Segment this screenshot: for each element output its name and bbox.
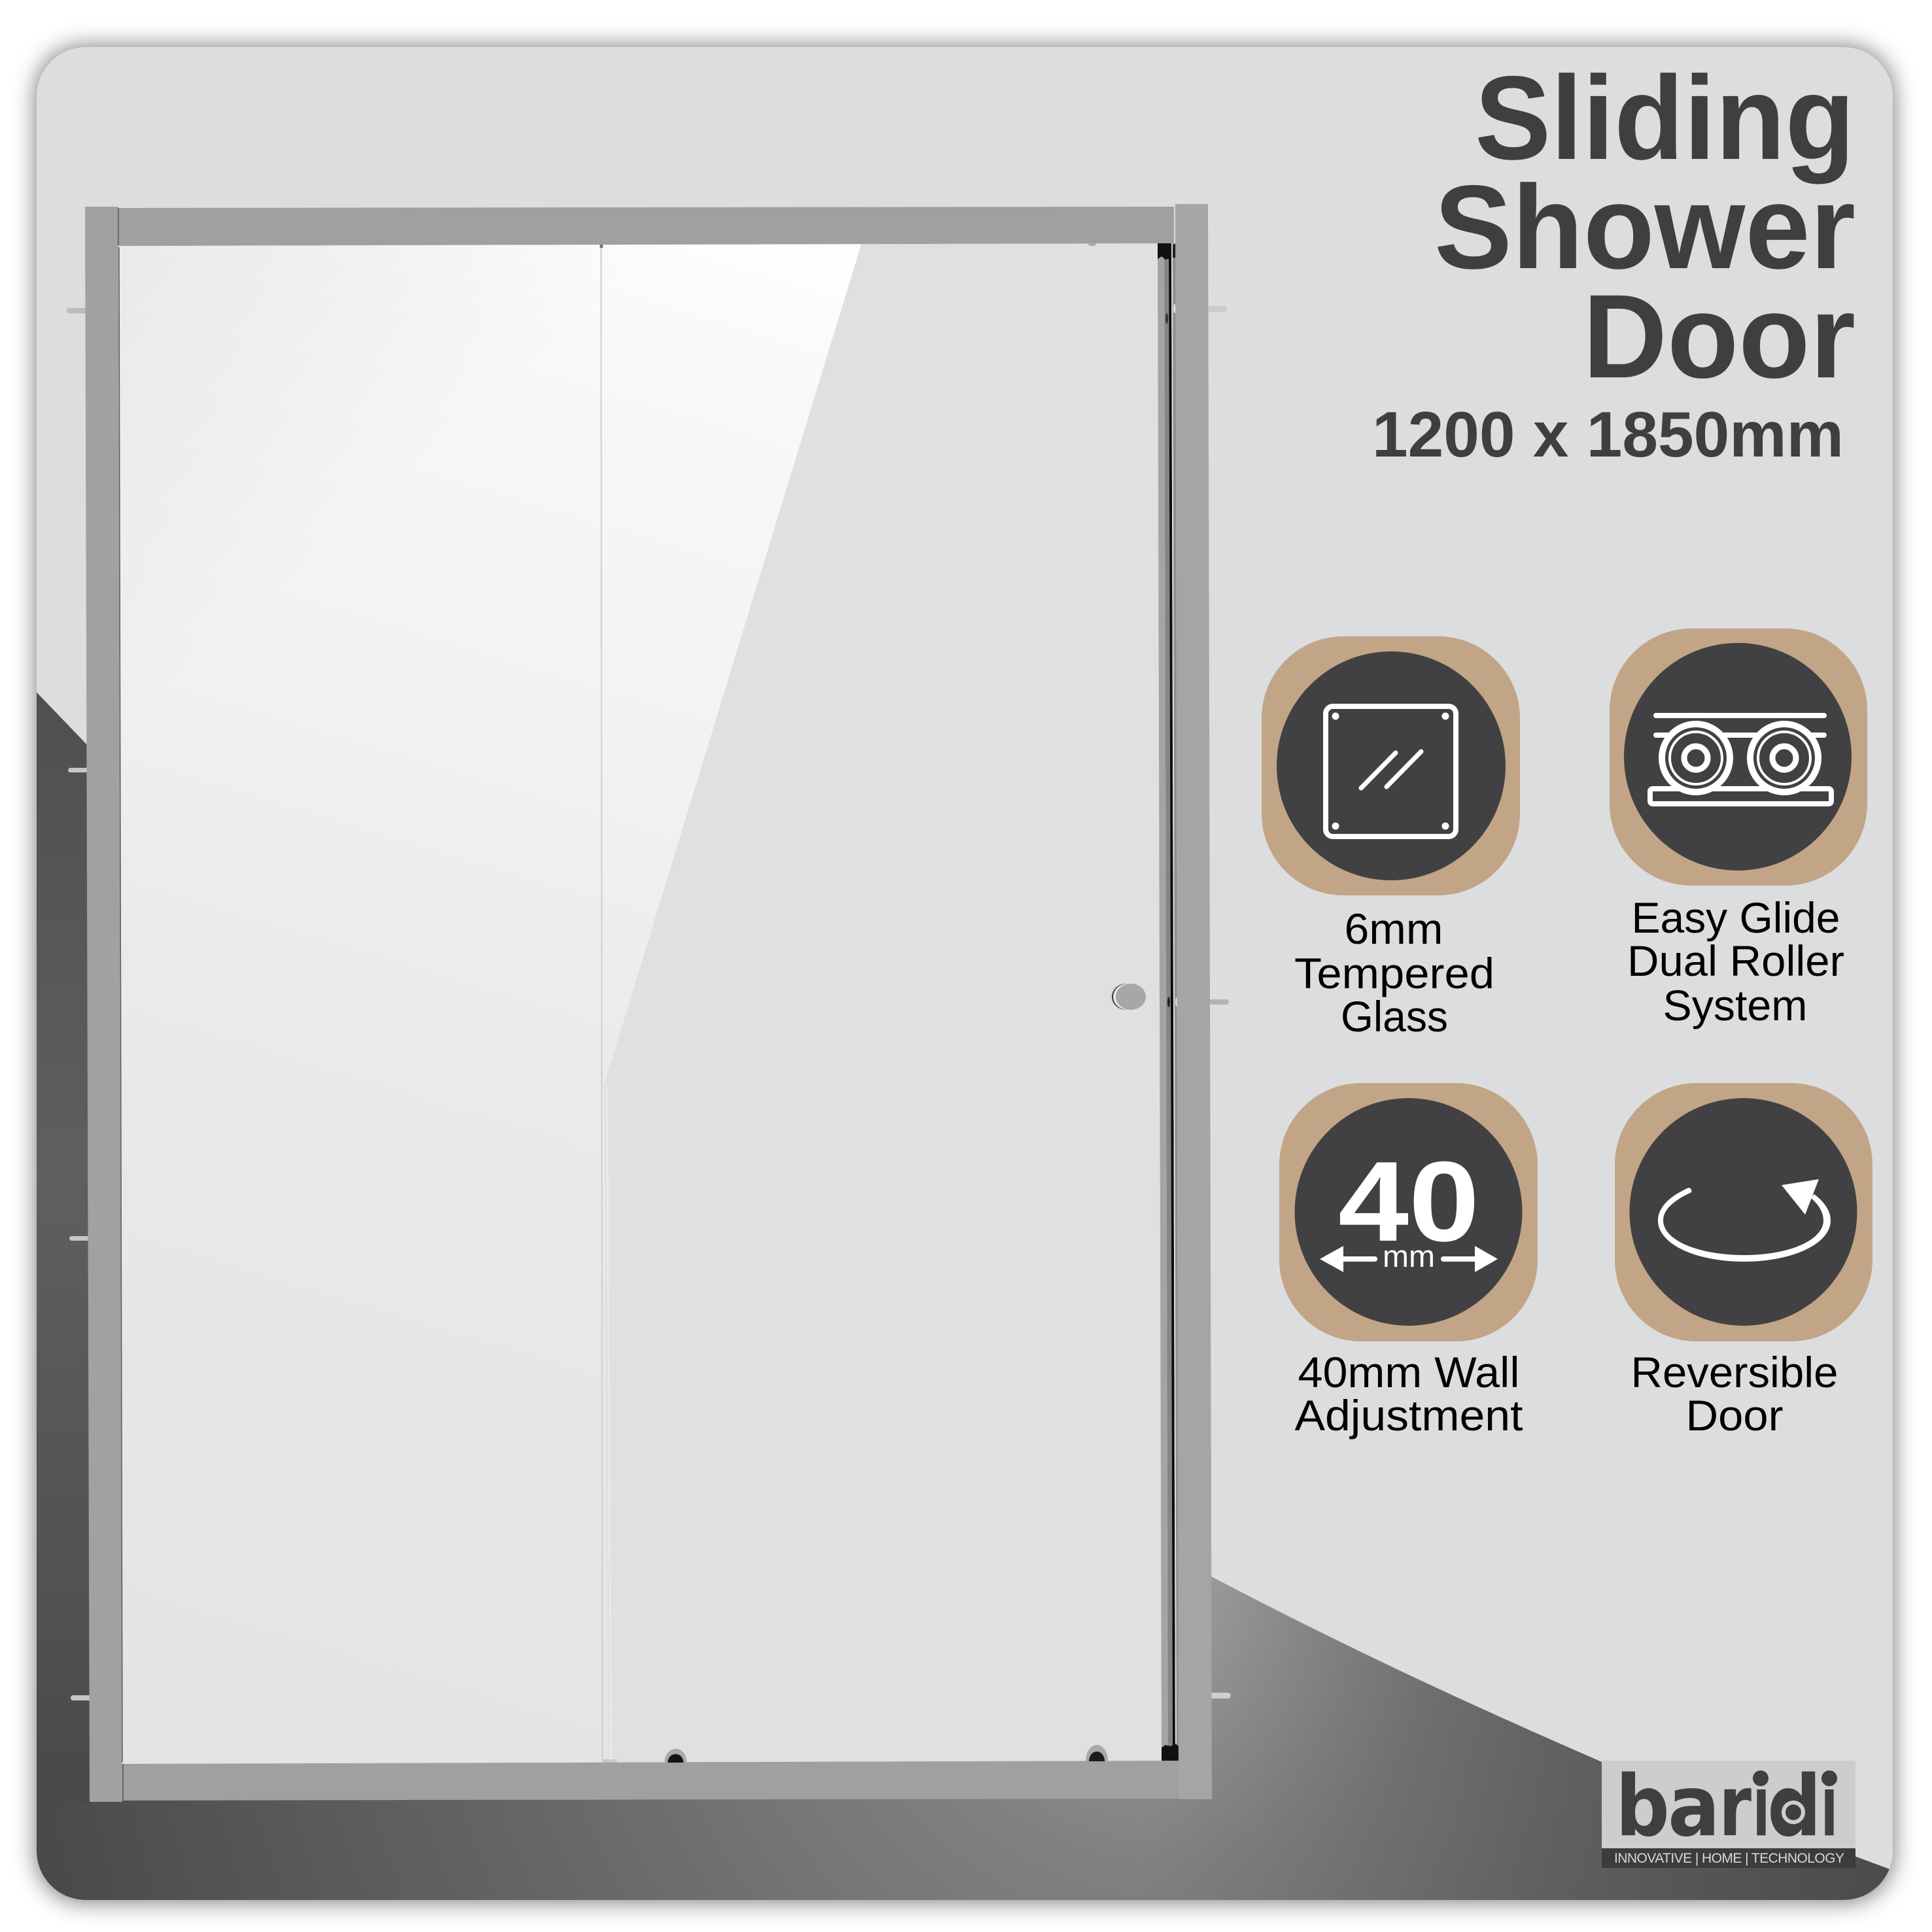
label: 6mm <box>1345 905 1443 953</box>
frame: right post <box>1175 204 1212 1799</box>
wall brackets <box>67 306 1231 1700</box>
frame: right side channel <box>1158 243 1181 1761</box>
badge <box>1610 629 1867 886</box>
label: Reversible <box>1631 1348 1838 1396</box>
label: Adjustment <box>1295 1391 1523 1440</box>
wordmark: a <box>1668 1758 1720 1855</box>
icon: 40 mm: 40 <box>1338 1137 1479 1265</box>
size subtitle: 1200 x 1850mm <box>1372 398 1844 470</box>
wordmark: i <box>1753 1758 1770 1855</box>
wordmark: d <box>1767 1758 1821 1855</box>
label <box>1295 1348 1523 1440</box>
label <box>1627 893 1844 1029</box>
badge <box>1262 636 1520 895</box>
badge <box>1615 1083 1872 1341</box>
label: Easy Glide <box>1631 893 1840 942</box>
label <box>1631 1348 1838 1440</box>
label: Glass <box>1341 992 1448 1041</box>
brand logo <box>1602 1758 1855 1868</box>
dark floor shape <box>26 681 1897 1910</box>
label <box>1294 905 1494 1041</box>
badge <box>1279 1083 1538 1341</box>
shower door <box>67 204 1231 1802</box>
title: Shower <box>1434 160 1855 294</box>
feature: tempered glass <box>1262 636 1520 1041</box>
icon: glass pane <box>1326 706 1456 837</box>
title: Door <box>1583 269 1855 403</box>
title <box>1434 51 1855 403</box>
wordmark: r <box>1719 1758 1751 1855</box>
wordmark details: round dots and ring <box>1751 1766 1839 1829</box>
icon: rollers <box>1650 716 1831 804</box>
frame: bottom rail <box>122 1761 1179 1801</box>
icon: 40 mm <box>1320 1137 1498 1273</box>
tagline: INNOVATIVE | HOME | TECHNOLOGY <box>1614 1851 1844 1866</box>
glass panels <box>115 243 1179 1765</box>
frame: left post <box>85 207 122 1802</box>
label: 40mm Wall <box>1298 1348 1520 1396</box>
wordmark: i <box>1821 1758 1838 1855</box>
door handle <box>1109 984 1146 1010</box>
icon: rotate arrow <box>1658 1179 1831 1262</box>
label: Dual Roller <box>1627 937 1844 985</box>
frame: top rail <box>119 207 1174 246</box>
title: Sliding <box>1475 51 1855 184</box>
bottom rollers <box>664 1745 1108 1763</box>
label: Tempered <box>1294 949 1494 997</box>
feature: dual roller <box>1610 629 1867 1029</box>
wordmark <box>1615 1758 1838 1855</box>
feature: reversible <box>1615 1083 1872 1440</box>
icon: 40 mm: mm <box>1383 1239 1435 1273</box>
label: System <box>1663 981 1808 1029</box>
wordmark: b <box>1615 1758 1670 1855</box>
label: Door <box>1686 1391 1783 1440</box>
feature: wall adjustment <box>1279 1083 1538 1440</box>
